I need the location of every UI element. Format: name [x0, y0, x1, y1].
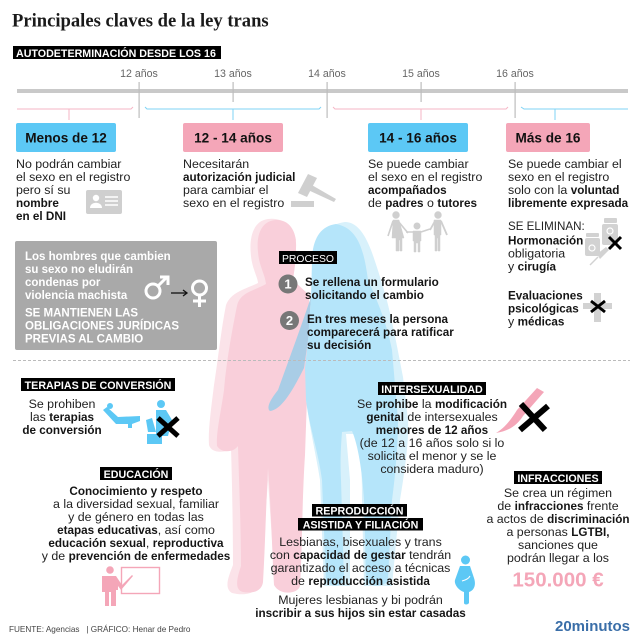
panel: intersexualidad: genital de intersexuales	[366, 410, 498, 424]
panel: intersexualidad: menores de 12 años	[376, 424, 489, 437]
panel: menos de 12: el sexo en el registro	[16, 170, 130, 184]
panel: terapias de conversión: Se prohiben	[29, 397, 96, 411]
panel: menos de 12: en el DNI	[16, 210, 66, 223]
icon: male to female	[146, 277, 206, 307]
panel: proceso: 2	[286, 313, 293, 328]
panel: intersexualidad: Se prohibe la modificación	[357, 397, 507, 411]
panel: educación: educación sexual, reproductiva	[48, 536, 224, 550]
panel: menos de 12: Menos de 12	[25, 130, 107, 146]
panel: educación	[42, 467, 231, 563]
panel: 12-14 años	[183, 123, 295, 210]
panel: menos de 12: nombre	[16, 197, 59, 210]
panel: proceso: PROCESO	[282, 254, 334, 265]
divider	[13, 360, 630, 362]
callout: violencia machista: PREVIAS AL CAMBIO	[25, 334, 143, 346]
panel: proceso: comparecerá para ratificar	[307, 326, 454, 339]
panel: terapias de conversión: las terapias	[30, 410, 95, 424]
panel: intersexualidad: INTERSEXUALIDAD	[381, 384, 483, 396]
panel: menos de 12: pero sí su	[16, 183, 71, 197]
panel: más de 16: psicológicas	[508, 302, 579, 316]
panel: infracciones: sanciones que	[518, 538, 598, 552]
icon: gavel	[291, 174, 336, 207]
timeline	[17, 68, 628, 120]
panel: más de 16	[506, 123, 629, 328]
timeline: 16 años	[496, 68, 534, 80]
title: Principales claves de la ley trans	[12, 10, 269, 32]
callout: violencia machista: violencia machista	[25, 290, 128, 302]
panel: educación: y de prevención de enfermedades	[42, 549, 231, 563]
icon: teacher	[102, 566, 160, 606]
panel: reproducción asistida: ASISTIDA Y FILIACIÓN	[303, 518, 418, 532]
timeline: 12 años	[120, 68, 158, 80]
panel: más de 16: sexo en el registro	[508, 170, 609, 184]
panel: infracciones: INFRACCIONES	[517, 473, 599, 485]
panel: 12-14 años: para cambiar el	[183, 183, 268, 197]
callout: violencia machista: su sexo no eludirán	[25, 264, 133, 276]
panel: intersexualidad	[357, 382, 507, 476]
panel: infracciones: a personas LGTBI,	[506, 525, 610, 539]
icon: pregnant woman	[455, 556, 475, 604]
panel: proceso: En tres meses la persona	[307, 313, 448, 326]
panel: más de 16: solo con la voluntad	[508, 183, 619, 197]
panel: más de 16: Evaluaciones	[508, 290, 583, 302]
panel: proceso: su decisión	[307, 339, 371, 352]
panel: menos de 12	[16, 123, 130, 223]
source: FUENTE: Agencias | GRÁFICO: Henar de Pedro	[9, 624, 191, 634]
silhouette: pink man	[209, 219, 309, 594]
timeline: 15 años	[402, 68, 440, 80]
icon: DNI card	[86, 190, 122, 214]
icon: hormones and surgery crossed	[585, 218, 621, 265]
callout: violencia machista: Los hombres que cambien	[25, 251, 171, 263]
panel: 14-16 años: acompañados	[368, 184, 447, 197]
panel: terapias de conversión: TERAPIAS DE CONVERSIÓN	[25, 379, 171, 392]
panel: reproducción asistida: de reproducción asistida	[291, 574, 430, 588]
panel: educación: etapas educativas, así como	[57, 523, 215, 537]
panel: infracciones: 150.000 €	[512, 568, 604, 592]
panel: proceso: 1	[284, 276, 292, 292]
panel: intersexualidad: considera maduro)	[380, 462, 484, 476]
callout: violencia machista	[15, 241, 217, 350]
panel: 12-14 años: Necesitarán	[183, 157, 249, 171]
panel: infracciones: podrán llegar a los	[507, 551, 609, 565]
panel: reproducción asistida: con capacidad de gestar tendrán	[270, 548, 451, 562]
callout: violencia machista: SE MANTIENEN LAS	[25, 308, 138, 320]
panel: infracciones: de infracciones frente	[497, 499, 619, 513]
panel: reproducción asistida: Lesbianas, bisexuales y trans	[279, 535, 442, 549]
panel: 14-16 años: el sexo en el registro	[368, 170, 482, 184]
icon: scalpel crossed	[496, 388, 548, 433]
panel: más de 16: Más de 16	[516, 130, 581, 146]
panel: menos de 12: No podrán cambiar	[16, 157, 121, 171]
panel: 14-16 años	[368, 123, 482, 210]
panel: educación: EDUCACIÓN	[104, 468, 168, 481]
panel: reproducción asistida: REPRODUCCIÓN	[316, 504, 403, 518]
panel: más de 16: Hormonación	[508, 234, 583, 248]
panel: proceso: Se rellena un formulario	[305, 276, 439, 289]
panel: 14-16 años: Se puede cambiar	[368, 157, 469, 171]
panel: educación: a la diversidad sexual, familiar	[53, 497, 219, 511]
panel: reproducción asistida: inscribir a sus hijos sin estar casadas	[255, 607, 466, 620]
panel: 12-14 años: autorización judicial	[183, 171, 295, 184]
panel: infracciones	[486, 471, 630, 592]
section label: autodeterminación: AUTODETERMINACIÓN DESDE LOS 16	[16, 47, 216, 60]
panel: proceso	[278, 251, 454, 352]
panel: proceso: solicitando el cambio	[305, 289, 424, 302]
panel: más de 16: y cirugía	[508, 260, 556, 274]
panel: 14-16 años: 14 - 16 años	[379, 130, 457, 146]
logo: 20minutos: 20minutos	[555, 618, 630, 635]
panel: 12-14 años: sexo en el registro	[183, 196, 284, 210]
panel: más de 16: SE ELIMINAN:	[508, 220, 585, 233]
panel: más de 16: libremente expresada	[508, 197, 629, 210]
panel: más de 16: y médicas	[508, 314, 565, 328]
silhouette: blue woman	[268, 222, 408, 586]
panel: terapias de conversión: de conversión	[22, 424, 102, 437]
panel: educación: y de género en todas las	[68, 510, 204, 524]
callout: violencia machista: condenas por	[25, 277, 101, 289]
panel: más de 16: Se puede cambiar el	[508, 157, 622, 171]
panel: más de 16: obligatoria	[508, 246, 565, 260]
panel: reproducción asistida: garantizado el acceso a técnicas	[271, 561, 450, 575]
timeline: 14 años	[308, 68, 346, 80]
panel: terapias de conversión	[21, 378, 175, 437]
icon: therapy crossed	[103, 400, 178, 444]
panel: infracciones: a actos de discriminación	[486, 512, 630, 526]
panel: intersexualidad: solicita el menor y se le	[368, 449, 496, 463]
panel: 14-16 años: de padres o tutores	[368, 196, 477, 210]
panel: reproducción asistida	[255, 504, 466, 620]
panel: reproducción asistida: Mujeres lesbianas y bi podrán	[278, 593, 443, 607]
panel: intersexualidad: (de 12 a 16 años solo si lo	[360, 436, 504, 450]
callout: violencia machista: OBLIGACIONES JURÍDICAS	[25, 320, 179, 332]
panel: infracciones: Se crea un régimen	[504, 486, 612, 500]
icon: family	[388, 212, 447, 252]
timeline: 13 años	[214, 68, 252, 80]
panel: 12-14 años: 12 - 14 años	[194, 130, 272, 146]
panel: educación: Conocimiento y respeto	[69, 485, 203, 498]
icon: medical cross crossed	[583, 293, 612, 322]
